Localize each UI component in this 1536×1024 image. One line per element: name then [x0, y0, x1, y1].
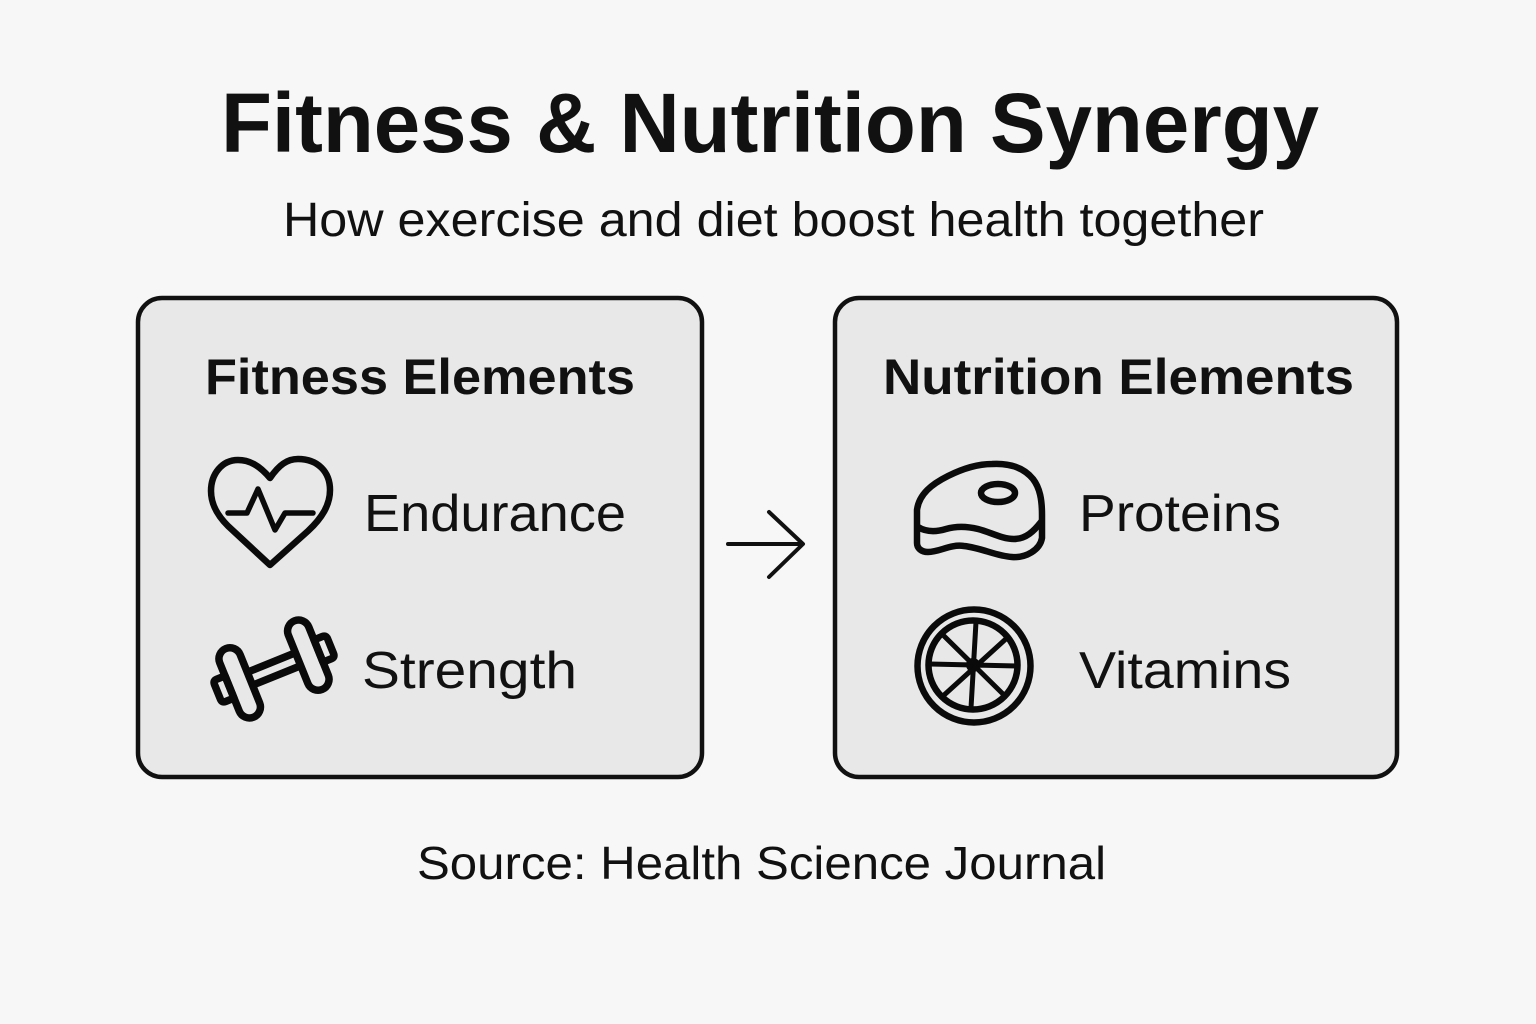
icon: citrus slice	[918, 610, 1030, 722]
subtitle: How exercise and diet boost health together	[283, 194, 1264, 247]
panel background: nutrition	[835, 298, 1397, 777]
icon: heart with pulse	[211, 459, 330, 565]
icon: dumbbell	[204, 612, 344, 726]
arrow	[728, 512, 803, 577]
title: Fitness & Nutrition Synergy	[221, 76, 1319, 170]
label: strength: Strength	[362, 642, 577, 700]
heading: nutrition elements: Nutrition Elements	[883, 349, 1354, 405]
label: endurance: Endurance	[364, 485, 626, 543]
panel background: fitness	[138, 298, 702, 777]
source note: Source: Health Science Journal	[417, 837, 1106, 889]
label: vitamins: Vitamins	[1079, 642, 1291, 700]
panel: nutrition elements	[835, 298, 1397, 777]
heading: fitness elements: Fitness Elements	[205, 349, 635, 405]
icon: steak	[917, 464, 1042, 557]
panel: fitness elements	[138, 298, 702, 777]
label: proteins: Proteins	[1079, 485, 1281, 543]
